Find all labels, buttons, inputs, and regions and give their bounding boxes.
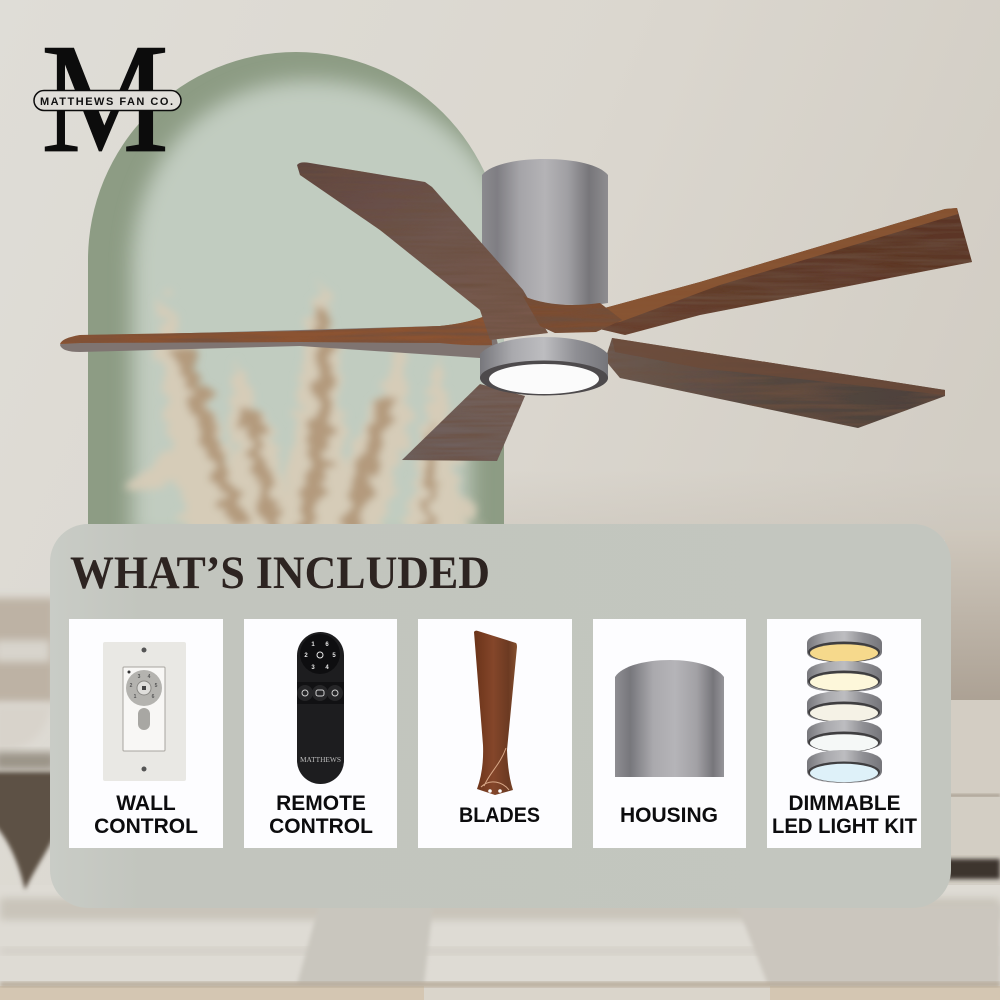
icon: wall control: 4 [148, 674, 151, 680]
card: remote control [244, 619, 397, 848]
background: arch niche [80, 45, 515, 540]
icon: remote control: MATTHEWS [300, 755, 341, 764]
icon: remote control: 6 [325, 642, 329, 648]
label: remote control: REMOTE [276, 792, 366, 815]
card: blades [418, 619, 572, 848]
icon: remote control: 5 [332, 653, 336, 659]
label: blades: BLADES [459, 804, 540, 827]
blade: bottom [402, 384, 525, 461]
label: dimmable led light kit: DIMMABLE [788, 792, 900, 815]
icon: wall control: 6 [152, 694, 155, 700]
icon: remote control [297, 632, 344, 784]
icon: wall control: 5 [155, 683, 158, 689]
label: wall control: WALL [116, 792, 176, 815]
icon: blade [474, 631, 517, 795]
icon: wall control: 3 [138, 674, 141, 680]
blade: right [570, 208, 972, 335]
housing [482, 159, 608, 305]
background: pampas grass [122, 278, 480, 540]
card: wall control [69, 619, 223, 848]
icon: remote control: 3 [311, 665, 315, 671]
panel: what's included [50, 524, 951, 908]
card: dimmable led light kit [767, 619, 921, 848]
icon: remote control: 2 [304, 653, 308, 659]
led ring cool [807, 720, 882, 752]
heading: what's included: WHAT’S INCLUDED [70, 547, 490, 599]
background: floor [0, 885, 1000, 1000]
background: sofa right [945, 530, 1000, 879]
logo: matthews fan co: M [41, 11, 169, 185]
icon: led light kit stack [807, 631, 882, 783]
logo: matthews fan co: MATTHEWS FAN CO. [40, 96, 173, 108]
icon: wall control: 2 [130, 683, 133, 689]
label: wall control: CONTROL [94, 815, 198, 838]
led ring soft [807, 661, 882, 692]
led ring neutral [807, 691, 882, 722]
icon: wall control [103, 642, 186, 781]
led ring warm [807, 631, 882, 662]
ceiling fan [60, 159, 972, 461]
icon: remote control: 4 [325, 665, 329, 671]
icon: remote control: 1 [311, 642, 315, 648]
label: housing: HOUSING [620, 804, 718, 827]
blade: upper left [297, 162, 548, 340]
blade: lower right [605, 338, 945, 428]
blade hub joint [523, 296, 622, 333]
icon: wall control: 1 [134, 694, 137, 700]
light kit [480, 337, 608, 396]
label: dimmable led light kit: LED LIGHT KIT [772, 815, 917, 838]
led ring daylight [807, 750, 882, 783]
blade: left [60, 314, 500, 358]
icon: housing [615, 660, 724, 777]
card: housing [593, 619, 746, 848]
label: remote control: CONTROL [269, 815, 373, 838]
background: chair and cushion left [0, 598, 55, 890]
